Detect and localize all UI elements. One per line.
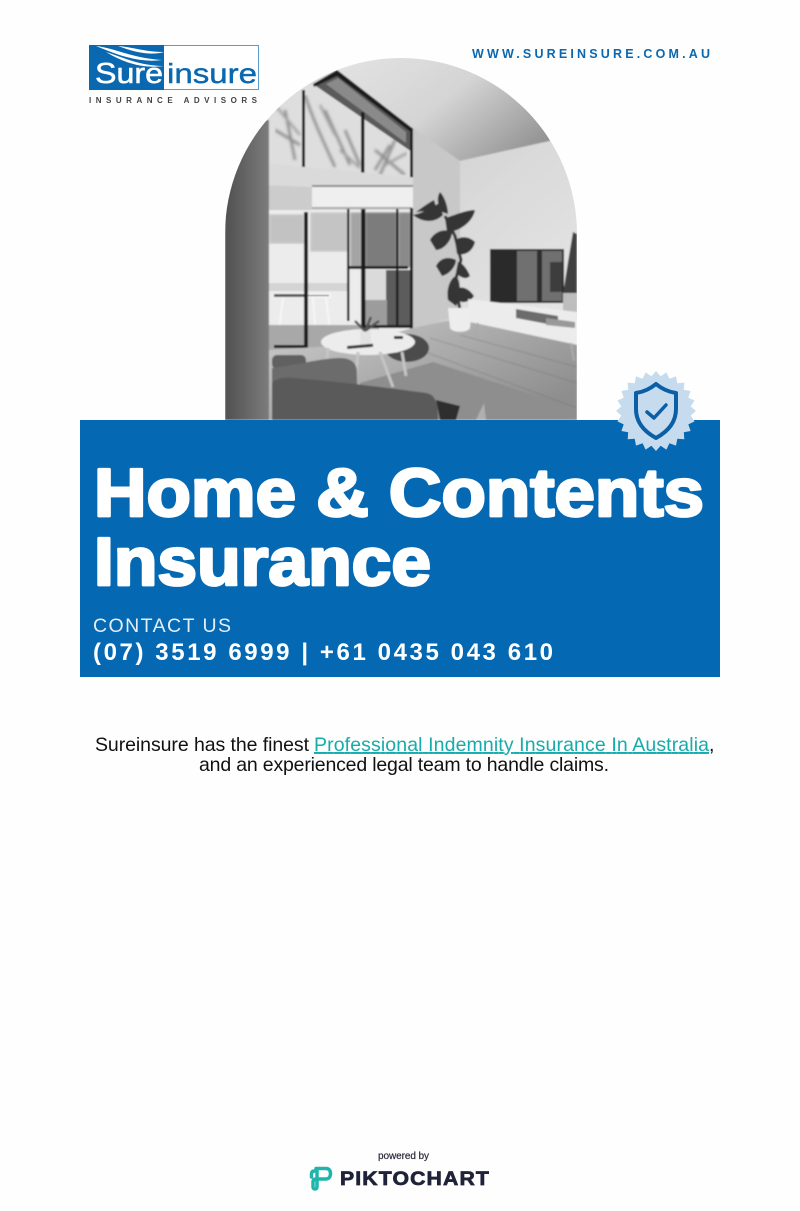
logo: Sureinsure: INSURANCE ADVISORS [89,96,258,105]
powered by piktochart: PIKTOCHART [340,1169,490,1190]
contact label: CONTACT US [93,615,231,637]
body text: , [709,734,714,756]
title [94,455,704,600]
upper window [275,70,414,178]
logo: Sureinsure: Sure [95,58,163,90]
television [490,249,564,303]
logo: Sureinsure: insure [167,58,257,89]
logo: Sureinsure [89,45,258,105]
right wall [576,230,577,319]
title: Insurance [94,524,431,600]
roller blind [312,185,420,209]
link: Professional Indemnity Insurance In Australia [314,734,709,756]
coffee table [321,317,415,387]
snake plant [563,232,577,294]
grey sofa [272,355,486,420]
icon: shield badge [616,371,696,451]
powered by piktochart: powered by [378,1151,429,1162]
room walls [443,320,576,345]
foreground dark wall [225,120,269,420]
floor [269,318,577,420]
inner wall [413,128,460,330]
window soffit [313,70,412,152]
arched photo: living room [225,50,590,420]
body text: Sureinsure has the finest [95,734,310,756]
website url: WWW.SUREINSURE.COM.AU [472,47,710,61]
body text [95,734,714,776]
ceiling [338,58,550,162]
media console [468,299,577,361]
fiddle leaf plant [413,192,475,310]
body text: and an experienced legal team to handle claims. [199,754,609,776]
blue title panel [80,420,720,677]
rug [360,362,514,419]
phone numbers: (07) 3519 6999 | +61 0435 043 610 [93,639,553,666]
icon: piktochart logo [312,1168,330,1189]
gallery beam [302,166,414,179]
pouf [385,334,429,362]
white planter [448,308,472,332]
lower glass doors [262,208,414,350]
powered by piktochart [312,1151,490,1190]
title: Home & Contents [94,455,704,531]
